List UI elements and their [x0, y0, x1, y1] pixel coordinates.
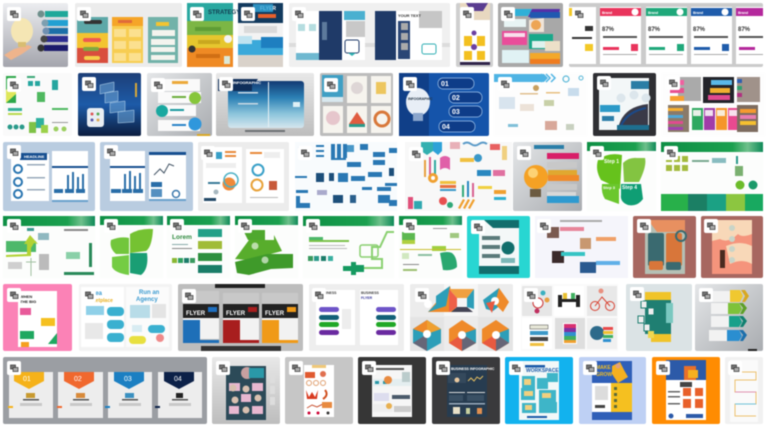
- tile: four green leaves: [100, 216, 163, 278]
- icon: lightbulb: INFOGRAPHIC: [408, 97, 433, 101]
- tile: multicolor chart elements: [405, 142, 512, 211]
- icon: lightbulb: [11, 18, 33, 47]
- set: gray with pink: [670, 77, 701, 101]
- card 03: 03: [124, 376, 132, 383]
- page: green: [646, 7, 687, 64]
- tile: peach circles flyer: [701, 216, 763, 278]
- heading: HEADLINE: [24, 154, 45, 159]
- tile: business flyer pills: BUSINESS: [361, 291, 380, 295]
- tile: blue lightbulb 01-04 infographic: [399, 73, 489, 136]
- steps: 04: [442, 124, 450, 131]
- icon: plug: [343, 262, 364, 275]
- heading: BUSINESS INFOGRAPHIC: [451, 367, 495, 371]
- heading: MAKE: [596, 365, 611, 371]
- steps: 02: [452, 95, 460, 102]
- tile: brochure spread with speech bubbles: [289, 3, 450, 67]
- steps: [438, 78, 482, 132]
- tile: pink poster: THE BIG: [20, 299, 36, 304]
- tile: teal form flyer: [467, 216, 530, 278]
- tile: pale blue yellow poster: GROW: [596, 372, 612, 378]
- card 03: [105, 372, 152, 418]
- tile: green teal blue hexagon steps: [147, 73, 212, 136]
- tile: orange and teal spread: [198, 142, 289, 211]
- tile: rose card flyer: [633, 216, 696, 278]
- tile: pink poster: [3, 284, 72, 351]
- tile: marketplace agency flyers: [79, 284, 172, 351]
- tags: [692, 108, 739, 130]
- tile: green report pages: [3, 73, 72, 136]
- tile: dark background infographic: [358, 357, 426, 424]
- card 04: 04: [174, 376, 182, 383]
- tile: assorted diagrams: [521, 284, 618, 351]
- page: magenta: [736, 7, 763, 64]
- tile: orange poster: [652, 357, 720, 424]
- heading: [560, 220, 602, 222]
- tile: red icon poster: [285, 357, 353, 424]
- page: magenta: Brand: [738, 11, 748, 15]
- tile: assorted banner set: [498, 3, 563, 67]
- tile: report spread with line chart: [100, 142, 193, 211]
- tile: green yellow numbered ribbons: [626, 284, 692, 351]
- caption: [245, 130, 285, 132]
- heading: INESS: [326, 291, 337, 295]
- page: magenta: 87%: [738, 27, 751, 33]
- tile: green leaf steps: Step 4: [622, 185, 637, 191]
- tile: headline report spread: [3, 142, 95, 211]
- tile: green ribbon steps: [235, 216, 298, 278]
- icon: glowing bulb: [524, 165, 548, 197]
- tile: sky blue workspace poster: [505, 357, 573, 424]
- set: purple tan: [668, 105, 689, 132]
- tile: blue flyer: [238, 3, 283, 67]
- icon: hand: [4, 45, 32, 60]
- card 02: 02: [74, 376, 82, 383]
- heading: Lorem: [172, 234, 192, 241]
- heading: STRATEGY: [208, 10, 240, 16]
- tile: geometric polygon charts: [410, 284, 513, 351]
- stacked bars: [563, 323, 577, 344]
- heading: WORKSPACE: [526, 368, 559, 374]
- tile: yellow and purple poster: [456, 3, 493, 67]
- flyer: red: FLYER: [226, 311, 246, 317]
- icon: globe: [590, 326, 613, 342]
- card 04: [155, 372, 202, 418]
- tile: brand manual pages: [569, 3, 763, 67]
- step labels: Step 1: [604, 159, 619, 165]
- title: [534, 145, 564, 149]
- tile: dark blue glass steps: [78, 73, 141, 136]
- hexagon chart 1: [413, 320, 441, 351]
- icon: dumbbell: [558, 293, 580, 307]
- page: red: [600, 7, 641, 64]
- tile: business flyer pills: [309, 284, 404, 351]
- tile: arrow banner report: [494, 73, 587, 136]
- hexagon chart 2: [449, 320, 476, 351]
- text block: YOUR TEXT: [398, 13, 421, 18]
- page: yellow: [569, 7, 596, 64]
- line chart: [154, 164, 174, 175]
- tile: strategy poster: [187, 3, 240, 67]
- tile: pale blue yellow poster: [579, 357, 646, 424]
- pentagon chart: [483, 288, 509, 313]
- step bars: [38, 10, 68, 52]
- heading: FLYER: [260, 6, 276, 12]
- heading: INFOGRAPHIC: [233, 80, 261, 85]
- tile: three flyers: [178, 284, 303, 351]
- tile: marketplace agency flyers: Marketplace: [84, 298, 113, 304]
- tile: infographic template collage: [320, 73, 393, 136]
- page: red: Brand: [602, 11, 612, 15]
- steps: 03: [452, 109, 460, 116]
- triangle chart: [424, 286, 456, 312]
- tile: arrow banners numbered: [695, 284, 763, 351]
- tile: Lorem green bars: [167, 216, 230, 278]
- tile: business flyer pills: FLYER: [361, 296, 373, 300]
- tile: orange bulb with numbered bars: [513, 142, 582, 211]
- tile: green city arrow infographic: [3, 216, 95, 278]
- heading: idea: [90, 291, 103, 297]
- page: green: 87%: [648, 27, 661, 33]
- tile: four numbered folded cards: [3, 357, 207, 424]
- tile: dark city business flyer: [593, 73, 656, 136]
- tile: blackboard infographic: [432, 357, 500, 424]
- heading: WHEN: [20, 294, 32, 299]
- card 01: [8, 372, 53, 418]
- tile: green leaf steps: [587, 142, 656, 211]
- tile: lightbulb in hand infographic: [3, 3, 68, 67]
- page: red: 87%: [602, 27, 615, 33]
- steps: 01: [441, 81, 449, 88]
- tile: green plug infographic: [303, 216, 394, 278]
- tile: blue infographic elements: [295, 142, 397, 211]
- page: blue: 87%: [693, 27, 706, 33]
- page: green: Brand: [648, 11, 658, 15]
- heading: Run an: [139, 290, 160, 296]
- set: dark: [703, 77, 734, 103]
- tile: colorful tag sets: [662, 73, 765, 136]
- table: [228, 81, 304, 128]
- page: blue: Brand: [693, 11, 703, 15]
- icon: speech bubble: [422, 44, 436, 54]
- tile: business photo steps: [535, 216, 628, 278]
- icon: bicycle: [590, 297, 614, 310]
- flyer: orange: FLYER: [265, 311, 285, 317]
- card 01: 01: [23, 376, 31, 383]
- tile: outlined timeline: [725, 357, 763, 424]
- page: blue: [691, 7, 732, 64]
- set: brown: [737, 77, 760, 102]
- numbered bars: [547, 153, 579, 203]
- tile: three colorful step infographics: [75, 3, 182, 67]
- set: orange on brown: [737, 105, 758, 132]
- card 02: [57, 372, 103, 418]
- tile: green banner report with arrows: [661, 142, 763, 211]
- tile: green banner mixed layout: [399, 216, 462, 278]
- tile: green leaf steps: Step 3: [603, 185, 616, 190]
- hexagon chart 3: [482, 320, 509, 351]
- flyer: blue: FLYER: [186, 311, 206, 317]
- square chart: [449, 289, 474, 312]
- tile: marketplace agency flyers: Agency: [136, 297, 158, 303]
- tile: dark photo circles poster: [212, 357, 280, 424]
- tile: business infographic table: [216, 73, 314, 136]
